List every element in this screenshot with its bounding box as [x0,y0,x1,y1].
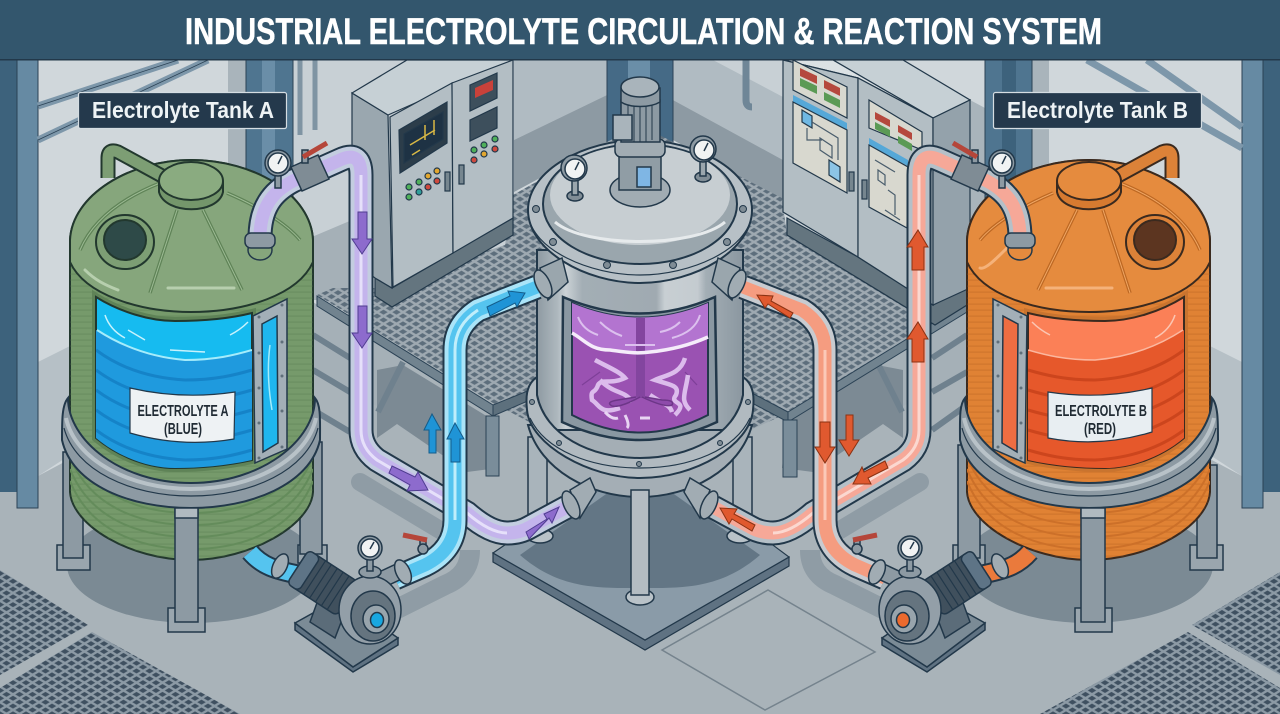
pipe: red from reactor to pump [743,287,1030,578]
tank B sight window [1028,297,1184,470]
floor [0,330,1280,714]
tank A label: ELECTROLYTE A [138,403,228,420]
floor gratings corners [0,570,1280,714]
tank B: orange [953,151,1223,632]
top cap [1057,182,1121,209]
manway [1126,215,1184,269]
reactor legs [527,437,753,543]
label: tank A [78,92,286,128]
tank A body [70,160,313,560]
gauge left [561,155,587,201]
reactor base plate [493,450,789,650]
tank A label: (BLUE) [164,421,202,438]
reactor window [562,297,717,440]
tank B front leg [1075,508,1112,632]
control cabinets right [783,60,970,325]
pipe fittings left [245,143,596,522]
label: tank B: Electrolyte Tank B [1007,97,1188,123]
vent pipe [1118,151,1172,178]
tank A sight window [96,297,252,470]
tank A: green [57,151,327,632]
gauge glass [993,299,1027,463]
tank B dome [967,160,1210,312]
reactor bottom dome [528,425,752,497]
platform front edges and legs [317,296,967,477]
pipe: blue from pump to reactor [250,287,537,578]
agitator motor [610,77,670,207]
tank A rear legs [57,442,327,570]
pipe fittings right [684,143,1035,522]
tank B rear legs [953,445,1223,570]
steps under platform left [313,302,498,472]
label: tank A: Electrolyte Tank A [92,97,274,123]
tank A front leg [168,508,205,632]
reactor vessel [526,77,754,605]
reactor top flange [528,140,752,283]
top cap [159,182,223,209]
structural columns and rails [0,60,1280,508]
flow arrows: red [720,230,928,531]
title bar [0,0,1280,60]
gauge right [690,136,716,182]
flow arrows: purple [352,212,559,539]
floor shadows [67,482,1213,623]
central grating platform [317,125,967,480]
lower flange [526,377,754,478]
tank A dome [70,160,313,312]
tank A label [130,388,235,442]
pump A [268,535,428,672]
tank B support ring [960,398,1218,508]
tank B label [1048,388,1152,442]
pump B [852,535,1012,672]
pipe: purple from tank A to reactor [260,157,567,533]
pipe: red from tank B to reactor [713,157,1020,533]
tank A support ring [62,398,320,508]
reactor body [537,250,743,430]
reactor centre leg [626,490,654,605]
tank B label: ELECTROLYTE B [1055,403,1147,420]
tank B body [967,160,1210,560]
vent pipe [108,151,162,178]
manway [96,215,154,269]
flow arrows: blue [424,291,525,462]
gauge glass [253,299,287,463]
tank B label: (RED) [1084,421,1116,438]
floor hatch [662,590,875,710]
label: tank B [994,92,1202,128]
control cabinets left [352,60,513,307]
steps under platform right [782,305,967,472]
